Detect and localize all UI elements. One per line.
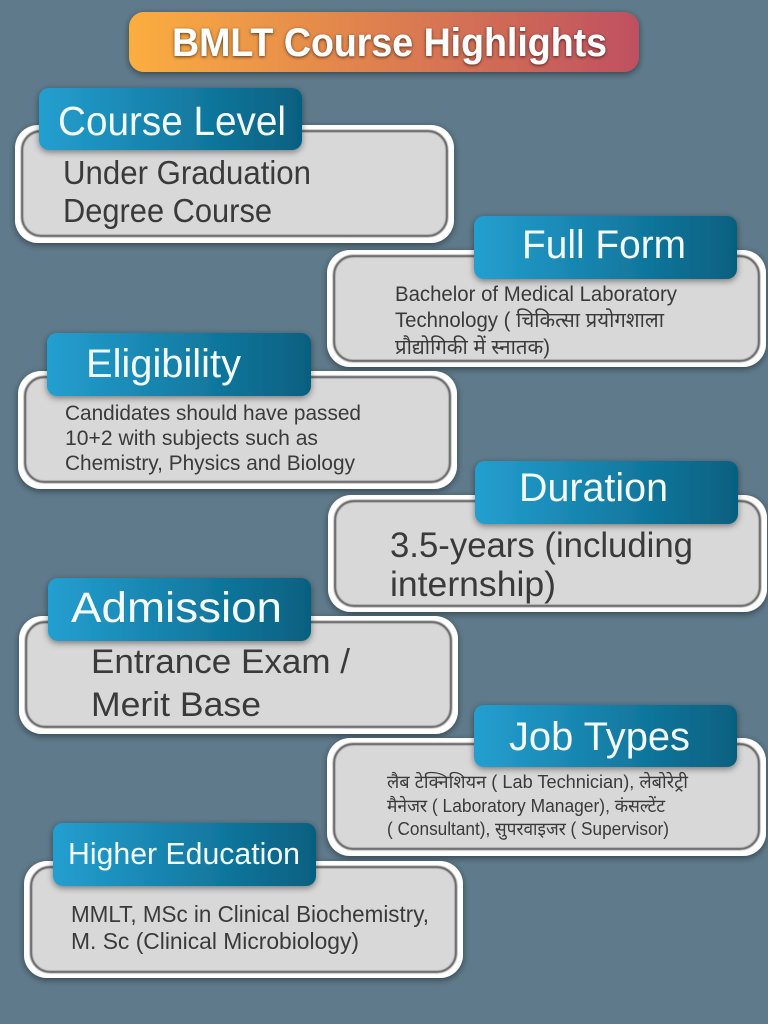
job types tab — [474, 705, 737, 767]
panel: job types — [327, 705, 766, 856]
course level text: Degree Course — [63, 192, 272, 229]
course level text: Under Graduation — [63, 154, 311, 191]
job types text: मैनेजर ( Laboratory Manager), कंसल्टेंट — [387, 795, 666, 816]
title: BMLT Course Highlights — [172, 21, 607, 65]
job types text — [387, 771, 688, 840]
title banner — [129, 12, 639, 72]
panel: duration — [328, 461, 767, 612]
duration tab: Duration — [519, 466, 668, 510]
eligibility tab — [47, 333, 311, 396]
job types tab: Job Types — [509, 715, 690, 759]
higher education text: MMLT, MSc in Clinical Biochemistry, — [71, 901, 429, 927]
course level tab: Course Level — [58, 98, 286, 144]
admission text: Merit Base — [91, 686, 261, 724]
eligibility text: Candidates should have passed — [65, 402, 361, 425]
admission tab — [48, 578, 311, 641]
panel: higher education — [24, 823, 463, 978]
higher education tab — [53, 823, 316, 886]
admission text — [91, 643, 351, 724]
job types text: ( Consultant), सुपरवाइजर ( Supervisor) — [387, 819, 669, 840]
higher education text — [71, 901, 429, 954]
full form tab: Full Form — [522, 223, 686, 267]
eligibility text — [65, 402, 361, 475]
full form text: प्रौद्योगिकी में स्नातक) — [395, 335, 550, 359]
duration text: 3.5-years (including — [390, 526, 693, 565]
panel: admission — [19, 578, 458, 734]
course level text — [63, 154, 311, 229]
full form tab — [474, 216, 737, 279]
duration text — [390, 526, 693, 604]
panel: course level — [15, 88, 454, 243]
full form text — [395, 283, 677, 359]
higher education tab: Higher Education — [68, 836, 300, 871]
course level tab — [39, 88, 302, 150]
job types text: लैब टेक्निशियन ( Lab Technician), लेबोरेट्री — [387, 771, 688, 792]
higher education text: M. Sc (Clinical Microbiology) — [71, 928, 359, 954]
duration text: internship) — [390, 565, 556, 604]
admission tab: Admission — [71, 584, 282, 632]
full form text: Technology ( चिकित्सा प्रयोगशाला — [395, 308, 665, 332]
eligibility text: 10+2 with subjects such as — [65, 427, 318, 450]
panel: full form — [327, 216, 766, 367]
admission text: Entrance Exam / — [91, 643, 351, 681]
eligibility text: Chemistry, Physics and Biology — [65, 452, 355, 475]
duration tab — [475, 461, 738, 524]
full form text: Bachelor of Medical Laboratory — [395, 283, 677, 306]
panel: eligibility — [18, 333, 457, 489]
eligibility tab: Eligibility — [86, 342, 241, 386]
